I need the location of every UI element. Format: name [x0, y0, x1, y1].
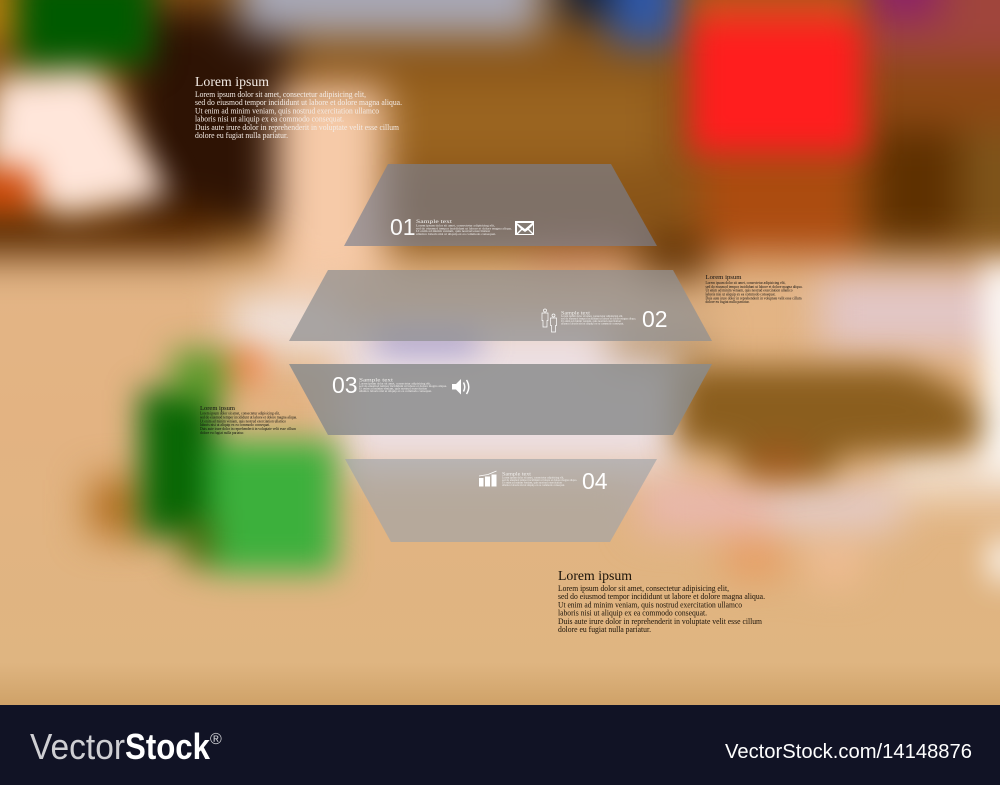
text block: bottom right: sed do eiusmod tempor incididunt ut labore et dolore magna aliqua.: [558, 591, 765, 601]
panel 4 text block: Ut enim ad minim veniam, quis nostrud exercitation: [502, 482, 563, 484]
image id: VectorStock.com/14148876: [725, 740, 972, 763]
panel 3: trapezoid with speaker: [289, 364, 712, 435]
panel 4 text block: [502, 472, 577, 487]
panel 4 text block: sed do eiusmod tempor incididunt ut labore et dolore magna aliqua.: [502, 479, 577, 482]
text block: left small: [200, 405, 297, 435]
text block: left small: Ut enim ad minim veniam, quis nostrud exercitation ullamco: [200, 418, 286, 424]
number 01: 01: [390, 214, 416, 240]
text block: left small: Lorem ipsum dolor sit amet, consectetur adipisicing elit,: [200, 410, 280, 416]
text block: right small: laboris nisi ut aliquip ex ea commodo consequat.: [706, 292, 776, 296]
panel 3 text block: Lorem ipsum dolor sit amet, consectetur adipisicing elit,: [359, 382, 431, 386]
text block: left small: laboris nisi ut aliquip ex ea commodo consequat.: [200, 422, 270, 427]
text block: bottom right: laboris nisi ut aliquip ex ea commodo consequat.: [558, 608, 707, 618]
icon: bar chart: [479, 471, 496, 486]
panel 4 text block: Lorem ipsum dolor sit amet, consectetur adipisicing elit,: [502, 476, 564, 480]
logo: VectorStock: VectorStock: [30, 726, 211, 767]
panel 2 text block: sed do eiusmod tempor incididunt ut labore et dolore magna aliqua.: [561, 318, 636, 320]
text block: bottom right: [558, 568, 765, 634]
text block: bottom right: dolore eu fugiat nulla pariatur.: [558, 624, 651, 634]
panel 1 text block: [416, 219, 512, 236]
text block: top left: Lorem ipsum: [195, 74, 270, 89]
text block: right small: dolore eu fugiat nulla pariatur.: [706, 299, 750, 304]
text block: right small: Duis aute irure dolor in reprehenderit in voluptate velit esse cillum: [706, 296, 802, 300]
text block: top left: Lorem ipsum dolor sit amet, consectetur adipisicing elit,: [195, 89, 366, 99]
panel 4 text block: Sample text: [502, 472, 532, 478]
panel 2 text block: Sample text: [561, 310, 591, 316]
panel 1 text block: ullamco laboris nisi ut aliquip ex ea commodo consequat.: [416, 233, 496, 236]
icon: speaker: [452, 379, 469, 394]
text block: top left: sed do eiusmod tempor incididunt ut labore et dolore magna aliqua.: [195, 97, 402, 107]
text block: right small: Ut enim ad minim veniam, quis nostrud exercitation ullamco: [706, 288, 792, 294]
panel 1 text block: Sample text: [416, 219, 453, 225]
text block: right small: Lorem ipsum dolor sit amet, consectetur adipisicing elit,: [706, 280, 786, 286]
text block: top left: dolore eu fugiat nulla pariatur.: [195, 130, 288, 140]
panel 2 text block: Lorem ipsum dolor sit amet, consectetur adipisicing elit,: [561, 315, 623, 318]
panel 2 text block: ullamco laboris nisi ut aliquip ex ea commodo consequat.: [561, 322, 624, 326]
text block: bottom right: Duis aute irure dolor in reprehenderit in voluptate velit esse cillum: [558, 616, 762, 626]
text block: bottom right: Lorem ipsum dolor sit amet, consectetur adipisicing elit,: [558, 583, 729, 593]
number 03: 03: [332, 372, 358, 398]
text block: top left: [195, 74, 402, 140]
text block: left small: dolore eu fugiat nulla pariatur.: [200, 430, 244, 435]
footer bar: [0, 705, 1000, 785]
panel 4 text block: ullamco laboris nisi ut aliquip ex ea commodo consequat.: [502, 484, 565, 487]
text block: bottom right: Ut enim ad minim veniam, quis nostrud exercitation ullamco: [558, 600, 742, 610]
panel 3 text block: Ut enim ad minim veniam, quis nostrud exercitation: [359, 388, 428, 390]
number 04: 04: [582, 468, 608, 494]
icon: people: [542, 309, 556, 332]
panel 2 text block: [561, 310, 636, 326]
text block: left small: sed do eiusmod tempor incididunt ut labore et dolore magna aliqua.: [200, 414, 297, 420]
text block: top left: Duis aute irure dolor in reprehenderit in voluptate velit esse cillum: [195, 122, 399, 132]
panel 1 text block: Lorem ipsum dolor sit amet, consectetur adipisicing elit,: [416, 224, 495, 228]
panel 3 text block: ullamco laboris nisi ut aliquip ex ea commodo consequat.: [359, 390, 432, 393]
panel 3 text block: Sample text: [359, 378, 394, 384]
panel 1 text block: Ut enim ad minim veniam, quis nostrud exercitation: [416, 230, 491, 233]
text block: left small: Duis aute irure dolor in reprehenderit in voluptate velit esse cillum: [200, 426, 297, 431]
panel 3 text block: [359, 378, 447, 393]
text block: top left: Ut enim ad minim veniam, quis nostrud exercitation ullamco: [195, 106, 379, 116]
panel 4: trapezoid with bar chart: [345, 459, 657, 542]
panel 1 text block: sed do eiusmod tempor incididunt ut labore et dolore magna aliqua.: [416, 228, 512, 230]
text block: right small: [706, 274, 802, 304]
logo: registered mark: ®: [210, 731, 222, 748]
text block: right small: Lorem ipsum: [706, 274, 742, 281]
text block: left small: Lorem ipsum: [200, 405, 235, 412]
panel 1: trapezoid with envelope: [344, 164, 657, 246]
text block: top left: laboris nisi ut aliquip ex ea commodo consequat.: [195, 114, 344, 124]
number 02: 02: [642, 306, 668, 332]
panel 3 text block: sed do eiusmod tempor incididunt ut labore et dolore magna aliqua.: [359, 385, 447, 388]
panel 2 text block: Ut enim ad minim veniam, quis nostrud exercitation: [561, 320, 622, 323]
panel 2: trapezoid with people: [289, 270, 712, 341]
text block: bottom right: Lorem ipsum: [558, 568, 632, 583]
icon: envelope: [515, 221, 534, 235]
text block: right small: sed do eiusmod tempor incididunt ut labore et dolore magna aliqua.: [706, 284, 802, 289]
